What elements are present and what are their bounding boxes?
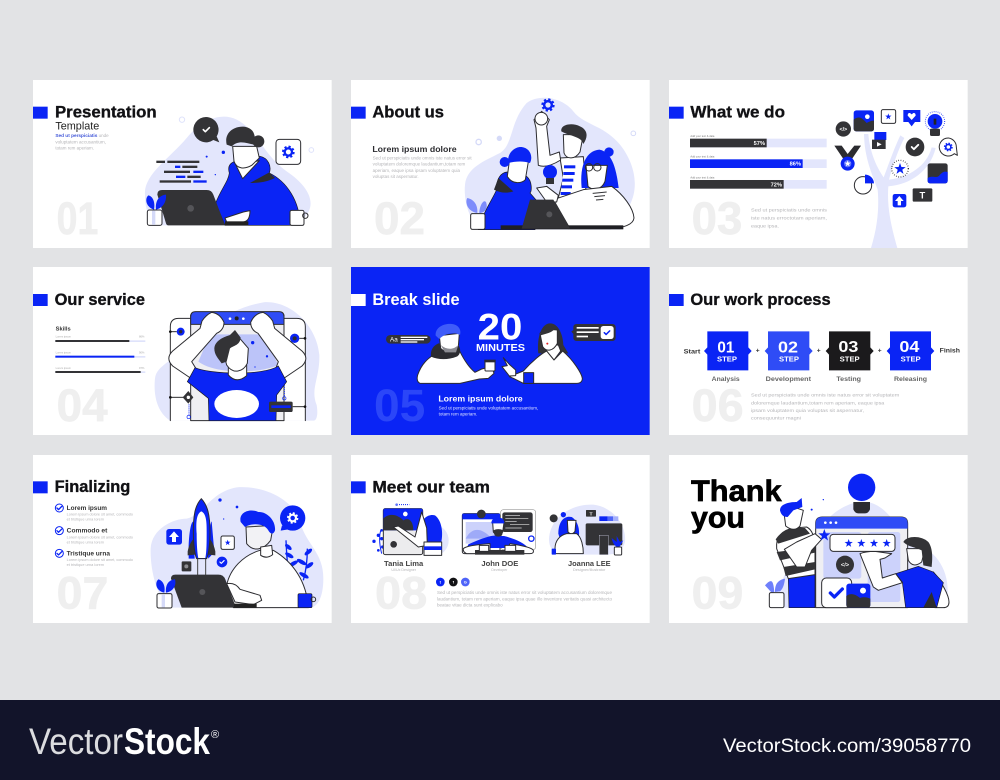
- body text: [439, 405, 538, 417]
- rating card: [830, 534, 895, 551]
- slide number: 01: [57, 193, 98, 244]
- accent square: [669, 107, 684, 119]
- body text: eaque ipsa.: [751, 223, 779, 229]
- heading: What we do: [690, 103, 785, 122]
- body text: [373, 156, 472, 179]
- skill bars: Lorem ipsum: [56, 366, 72, 370]
- icon: check: [217, 557, 227, 567]
- team member: Joanna Lee: [549, 505, 625, 555]
- subheading: Lorem ipsum dolore: [372, 144, 457, 154]
- icon: media: [872, 132, 886, 149]
- finish label: Finish: [940, 347, 960, 354]
- checklist: Commodo et: [67, 528, 108, 535]
- body text: ipsam voluptatem quia voluptas sit aspernatur,: [751, 408, 864, 413]
- body text: Sed ut perspiciatis unde omnis iste natus error sit voluptatem accusantium doloremque: [437, 590, 613, 595]
- slide number: 09: [692, 568, 743, 619]
- icon: gear box: [276, 139, 301, 164]
- step 4: STEP: [901, 354, 921, 363]
- heading line 2: you: [691, 501, 745, 534]
- social icons: f: [453, 579, 455, 584]
- heading line 1: Thank: [691, 475, 782, 508]
- illustration: idea tree: [864, 134, 936, 248]
- social icons: G: [464, 579, 467, 584]
- icon: code: </>: [839, 127, 847, 133]
- slide 4: our service: [33, 267, 332, 435]
- big time: 20: [478, 306, 522, 348]
- body text: laudantium, totam rem aperiam, eaque ipsa quae illo inventore veritatis quasi architecto: [437, 596, 613, 601]
- bubble: checklist: [571, 324, 616, 341]
- icon: chart picture: [928, 163, 948, 183]
- start label: Start: [684, 348, 701, 355]
- accent square: [33, 107, 48, 119]
- step labels: Testing: [836, 376, 861, 383]
- skill bars: 90%: [139, 350, 145, 354]
- subheading: Template: [55, 121, 99, 133]
- step 1: [704, 331, 752, 370]
- team member: Tania Lima: [372, 503, 449, 555]
- brand logo: ®: [211, 729, 219, 741]
- slide number: 05: [374, 380, 425, 431]
- icon: heart bubble: [903, 110, 920, 126]
- illustration: man with coffee: [417, 324, 496, 383]
- connectors: +: [756, 348, 760, 355]
- checklist: et tristique urna lorem: [67, 563, 104, 567]
- step 4: 04: [899, 339, 919, 356]
- intro text: [55, 133, 109, 151]
- skill bars: 86%: [139, 335, 145, 339]
- icon: type: T: [919, 191, 925, 201]
- bubble: text sample: Aa: [390, 336, 398, 343]
- step labels: Development: [766, 376, 812, 383]
- accent square: [33, 481, 48, 493]
- checklist: [55, 504, 133, 567]
- step labels: Analysis: [712, 376, 740, 383]
- illustration: people rating a page: </>: [841, 563, 850, 569]
- icon: gear bubble: [939, 138, 957, 156]
- body text: voluptatem doloremque laudantium,totam rem: [373, 162, 466, 167]
- team member name: Joanna LEE: [568, 559, 611, 568]
- progress bars: Add your text & data: [690, 155, 715, 159]
- image id: VectorStock.com/39058770: [723, 736, 971, 757]
- picture card: [846, 584, 870, 608]
- footer bar: [0, 700, 1000, 780]
- heading: Break slide: [372, 290, 460, 309]
- step 4: [887, 331, 934, 370]
- body text: Sed ut perspiciatis unde omnis iste natus error sit voluptatem: [751, 393, 899, 398]
- illustration: man holding web page: [155, 302, 319, 421]
- brand logo: Stock: [124, 721, 210, 762]
- team member role: Developer: [491, 568, 508, 572]
- icon: star box: [221, 536, 234, 549]
- connectors: +: [817, 348, 821, 355]
- intro text: unde: [99, 133, 109, 138]
- check card: [822, 578, 852, 608]
- step 2: 02: [778, 339, 798, 356]
- team member role: Designer/Illustrator: [573, 568, 606, 572]
- progress bars: 72%: [771, 182, 782, 188]
- checklist: et tristique urna lorem: [67, 518, 104, 522]
- body text: Sed ut perspiciatis unde voluptatem accusantium,: [439, 405, 538, 410]
- connectors: +: [878, 348, 882, 355]
- body text: aperiam, eaque ipsa ipsam voluptatem quia: [373, 168, 461, 173]
- step 3: [826, 331, 874, 370]
- icon: star box: [881, 110, 896, 123]
- slide 7: finalizing: [33, 455, 332, 623]
- team member role: UI/Ux Designer: [391, 568, 417, 572]
- social icons: t: [440, 579, 442, 584]
- icon: pie chart: [854, 175, 874, 194]
- body text: beatae vitae dicta sunt explicabo: [437, 603, 503, 608]
- icon: medal: [834, 146, 861, 171]
- checklist: Lorem ipsum dolore sit amet, commodo: [67, 535, 133, 539]
- intro text: voluptatem accusantium,: [55, 139, 106, 144]
- checklist: Lorem ipsum dolore sit amet, commodo: [67, 513, 133, 517]
- slide number: 08: [375, 568, 427, 619]
- body text: [751, 393, 899, 421]
- body text: [751, 208, 828, 229]
- code lines: [156, 117, 314, 183]
- icon: picture: [854, 110, 874, 131]
- accent square: [351, 481, 366, 493]
- slide number: 07: [57, 568, 108, 619]
- illustration: person at laptop: [145, 117, 311, 225]
- progress bars: Add your text & data: [690, 134, 715, 138]
- minutes label: MINUTES: [476, 343, 525, 354]
- subheading: Lorem ipsum dolore: [438, 394, 523, 404]
- intro text: totam rem aperiam.: [55, 146, 94, 151]
- step 2: STEP: [779, 355, 799, 364]
- body text: consequuntur magni: [751, 416, 801, 421]
- accent square: [669, 294, 684, 306]
- body text: Sed ut perspiciatis unde omnis iste natus error sit: [373, 156, 472, 161]
- slide 5: break slide: [351, 267, 650, 435]
- brand logo: Vector: [29, 721, 123, 762]
- slide 8: team: [351, 455, 650, 623]
- progress bars: 86%: [790, 162, 801, 168]
- icon: dark square: [182, 561, 191, 571]
- body text: voluptas sit aspernatur.: [373, 174, 419, 179]
- bubble: text sample: [386, 335, 431, 344]
- accent square: [351, 107, 366, 119]
- step 2: [765, 331, 813, 370]
- connectors: [756, 348, 882, 355]
- slide number: 06: [692, 380, 744, 431]
- skill bars: Lorem ipsum: [56, 350, 72, 354]
- progress bars: 57%: [754, 141, 765, 147]
- checklist: Tristique urna: [67, 550, 110, 557]
- progress bars: Add your text & data: [690, 175, 715, 179]
- icon: upload: [893, 194, 906, 207]
- heading: Finalizing: [55, 477, 130, 496]
- social icons: [436, 578, 470, 586]
- skill bars: Lorem ipsum: [56, 335, 72, 339]
- slide number: 02: [374, 193, 425, 244]
- brand logo: [29, 721, 219, 762]
- skill bars: 97%: [139, 366, 145, 370]
- icon: speech bubble with check: [193, 117, 219, 142]
- body text: Sed ut perspiciatis unde omnis: [751, 208, 828, 214]
- body text: totam rem aperiam.: [439, 412, 477, 417]
- heading: Presentation: [55, 103, 157, 122]
- illustration: team of three: [465, 98, 636, 230]
- slide number: 04: [57, 380, 108, 431]
- accent square: [351, 294, 366, 306]
- skills heading: Skills: [56, 327, 71, 333]
- slide 3: what we do: [669, 80, 968, 248]
- icon: upload: [166, 529, 182, 545]
- step labels: [712, 376, 927, 383]
- icon: star burst: [892, 160, 908, 177]
- step 3: 03: [838, 339, 858, 356]
- icon: bulb: [925, 112, 945, 136]
- heading: Our work process: [690, 290, 831, 309]
- illustration: people rating a page: [765, 474, 949, 608]
- team member: Joanna Lee: T: [589, 512, 593, 518]
- step 1: STEP: [717, 355, 737, 364]
- illustration: woman with mug: [502, 323, 582, 383]
- icon: code: [836, 121, 851, 137]
- slide number: 03: [692, 193, 742, 244]
- step labels: Releasing: [894, 376, 927, 383]
- team member name: Tania Lima: [384, 559, 424, 568]
- heading: Our service: [55, 290, 145, 309]
- skill bars: [55, 335, 145, 373]
- team member: John Doe: [462, 510, 536, 555]
- team member name: John DOE: [481, 559, 518, 568]
- body text: [437, 590, 613, 608]
- slide 2: about us: [351, 80, 650, 248]
- progress bars: [690, 134, 827, 189]
- checklist: et tristique urna lorem: [67, 540, 104, 544]
- checklist: Lorem ipsum dolore sit amet, commodo: [67, 558, 133, 562]
- icon: type: [913, 188, 932, 202]
- body text: iste natus erroctotam aperiam,: [751, 216, 827, 222]
- checklist: Lorem ipsum: [67, 505, 107, 512]
- slide 9: thank you: [669, 455, 968, 623]
- body text: doloremque laudantium,totam rem aperiam, eaque ipsa: [751, 400, 885, 405]
- icon: check circle: [906, 138, 924, 156]
- heading: Meet our team: [372, 477, 490, 496]
- step 3: STEP: [840, 354, 860, 363]
- slide 6: work process: [669, 267, 968, 435]
- intro text: Sed ut perspiciatis: [55, 133, 98, 138]
- slide 1: presentation: [33, 80, 332, 248]
- illustration: person launching rocket: [151, 487, 323, 608]
- step 1: 01: [717, 340, 734, 357]
- heading: About us: [372, 103, 444, 122]
- accent square: [33, 294, 48, 306]
